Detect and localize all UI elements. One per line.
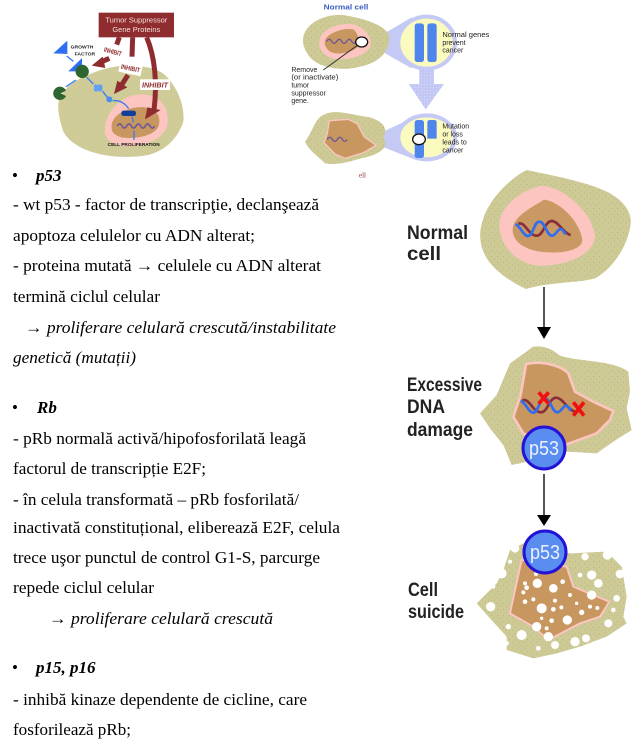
arrow 1	[537, 287, 551, 339]
label: cell suicide: suicide	[408, 602, 464, 623]
label: cell suicide: Cell	[408, 580, 438, 601]
normal cell nucleus	[319, 24, 371, 59]
normal genes label: Normal genes	[442, 32, 490, 39]
label: normal cell: cell	[407, 244, 441, 265]
remove label: suppressor	[291, 90, 327, 97]
suppressor protein box: Tumor Suppressor	[105, 16, 168, 25]
signalling pathway	[66, 56, 134, 140]
remove label: tumor	[291, 82, 310, 89]
label: excessive dna damage: damage	[407, 420, 473, 441]
p53 badge lower: p53	[530, 542, 560, 564]
heading: p15, p16: p15, p16	[34, 658, 96, 677]
damaged nucleus	[513, 363, 613, 444]
inhibit labels: INHIBIT	[103, 47, 122, 58]
inhibit labels: INHIBIT	[120, 64, 141, 75]
heading: Rb: Rb	[36, 398, 57, 417]
inhibit labels: INHIBIT	[142, 81, 169, 90]
heading: p53: •	[12, 166, 18, 185]
p53 badge upper: p53	[529, 438, 559, 460]
dna	[327, 39, 356, 43]
remove label: Remove	[291, 67, 317, 74]
panel: excessive DNA damage	[480, 346, 632, 465]
body: Rb: trece uşor punctul de control G1-S, parcurge	[13, 548, 320, 567]
body: Rb: - în celula transformată – pRb fosforilată/	[13, 490, 299, 509]
mutated nucleus	[324, 119, 376, 158]
cell body	[480, 346, 632, 465]
text block: p53	[12, 166, 340, 367]
growth factor triangles	[53, 41, 82, 71]
heading: p15, p16: •	[12, 658, 18, 677]
label: excessive dna damage: Excessive	[407, 375, 482, 396]
label: excessive dna damage: DNA	[407, 397, 445, 418]
normal chromosomes	[415, 23, 437, 62]
dna helix	[515, 221, 571, 236]
nucleus	[499, 186, 595, 266]
body: p53: - wt p53 - factor de transcripţie, declanşează	[13, 195, 319, 214]
panel: cell suicide	[477, 543, 627, 658]
red x marks	[539, 392, 584, 416]
down arrow	[409, 68, 444, 109]
p53 badge lower	[524, 531, 566, 573]
upper magnifier circle	[398, 17, 455, 69]
cell body	[477, 543, 627, 658]
nucleus	[105, 94, 168, 146]
text block: p15, p16	[12, 658, 311, 739]
magnifier cone lower	[365, 118, 412, 158]
body: p53: - proteina mutată → celulele cu ADN alterat	[13, 256, 321, 275]
DNA strand	[117, 124, 155, 128]
mutated cell	[305, 112, 385, 164]
body: p53: → proliferare celulară crescută/instabilitate	[25, 318, 336, 337]
normal cell	[303, 15, 389, 69]
remove label: (or inactivate)	[291, 75, 338, 82]
cell body	[480, 170, 631, 289]
deletion marker	[413, 134, 425, 145]
caption fragment: ell	[359, 171, 366, 179]
heading: Rb: •	[12, 398, 18, 417]
body: p53: termină ciclul celular	[13, 287, 160, 306]
label: normal cell: Normal	[407, 223, 468, 244]
mutation label: or loss	[442, 132, 463, 139]
inhibit arrowheads	[92, 57, 161, 119]
suppressor protein box	[99, 13, 174, 37]
diagram: normal cell to mutated cell	[291, 3, 490, 179]
mutation label: leads to	[442, 140, 467, 147]
diagram: p53 cell fate	[407, 170, 632, 658]
pointer line	[323, 45, 357, 70]
shrunken nucleus	[510, 560, 609, 640]
mutated chromosomes	[415, 120, 437, 158]
gene marker	[356, 37, 368, 47]
cell proliferation label: CELL PROLIFERATION	[108, 142, 160, 148]
body: p53: genetică (mutații)	[13, 348, 136, 367]
body: p53: apoptoza celulelor cu ADN alterat;	[13, 226, 255, 245]
body: Rb: → proliferare celulară crescută	[49, 609, 273, 628]
diagram: tumor suppressor gene proteins	[53, 13, 184, 157]
suppressor protein box: Gene Proteins	[112, 25, 161, 34]
body: Rb: - pRb normală activă/hipofosforilată leagă	[13, 429, 306, 448]
body: p15, p16: fosforilează pRb;	[13, 720, 131, 739]
growth factor label: FACTOR	[75, 52, 95, 58]
remove label: gene.	[291, 98, 309, 105]
heading: p53: p53	[34, 166, 62, 185]
panel: normal cell	[480, 170, 631, 289]
inhibit arrows	[98, 37, 155, 110]
p53 badge upper	[523, 427, 565, 469]
body: p15, p16: - inhibă kinaze dependente de cicline, care	[13, 690, 307, 709]
mutation label: Mutation	[442, 124, 469, 131]
arrow 2	[537, 474, 551, 526]
body: Rb: repede ciclul celular	[13, 578, 154, 597]
lower magnifier circle	[398, 115, 455, 159]
inhibit labels	[101, 42, 170, 90]
dna helix	[521, 398, 575, 413]
magnifier cone upper	[367, 17, 412, 68]
title: Normal cell	[324, 3, 368, 12]
growth factor label: GROWTH	[71, 45, 94, 51]
normal genes label: cancer	[442, 48, 464, 55]
dna	[327, 137, 347, 141]
text block: Rb	[12, 398, 344, 628]
vacuoles	[486, 544, 624, 651]
signal nodes	[94, 85, 136, 116]
body: Rb: inactivată constituțional, eliberează E2F, celula	[13, 518, 340, 537]
receptors	[53, 65, 89, 100]
normal genes label: prevent	[442, 40, 466, 47]
mutation label: cancer	[442, 148, 464, 155]
cell body	[58, 66, 184, 157]
body: Rb: factorul de transcripție E2F;	[13, 459, 206, 478]
